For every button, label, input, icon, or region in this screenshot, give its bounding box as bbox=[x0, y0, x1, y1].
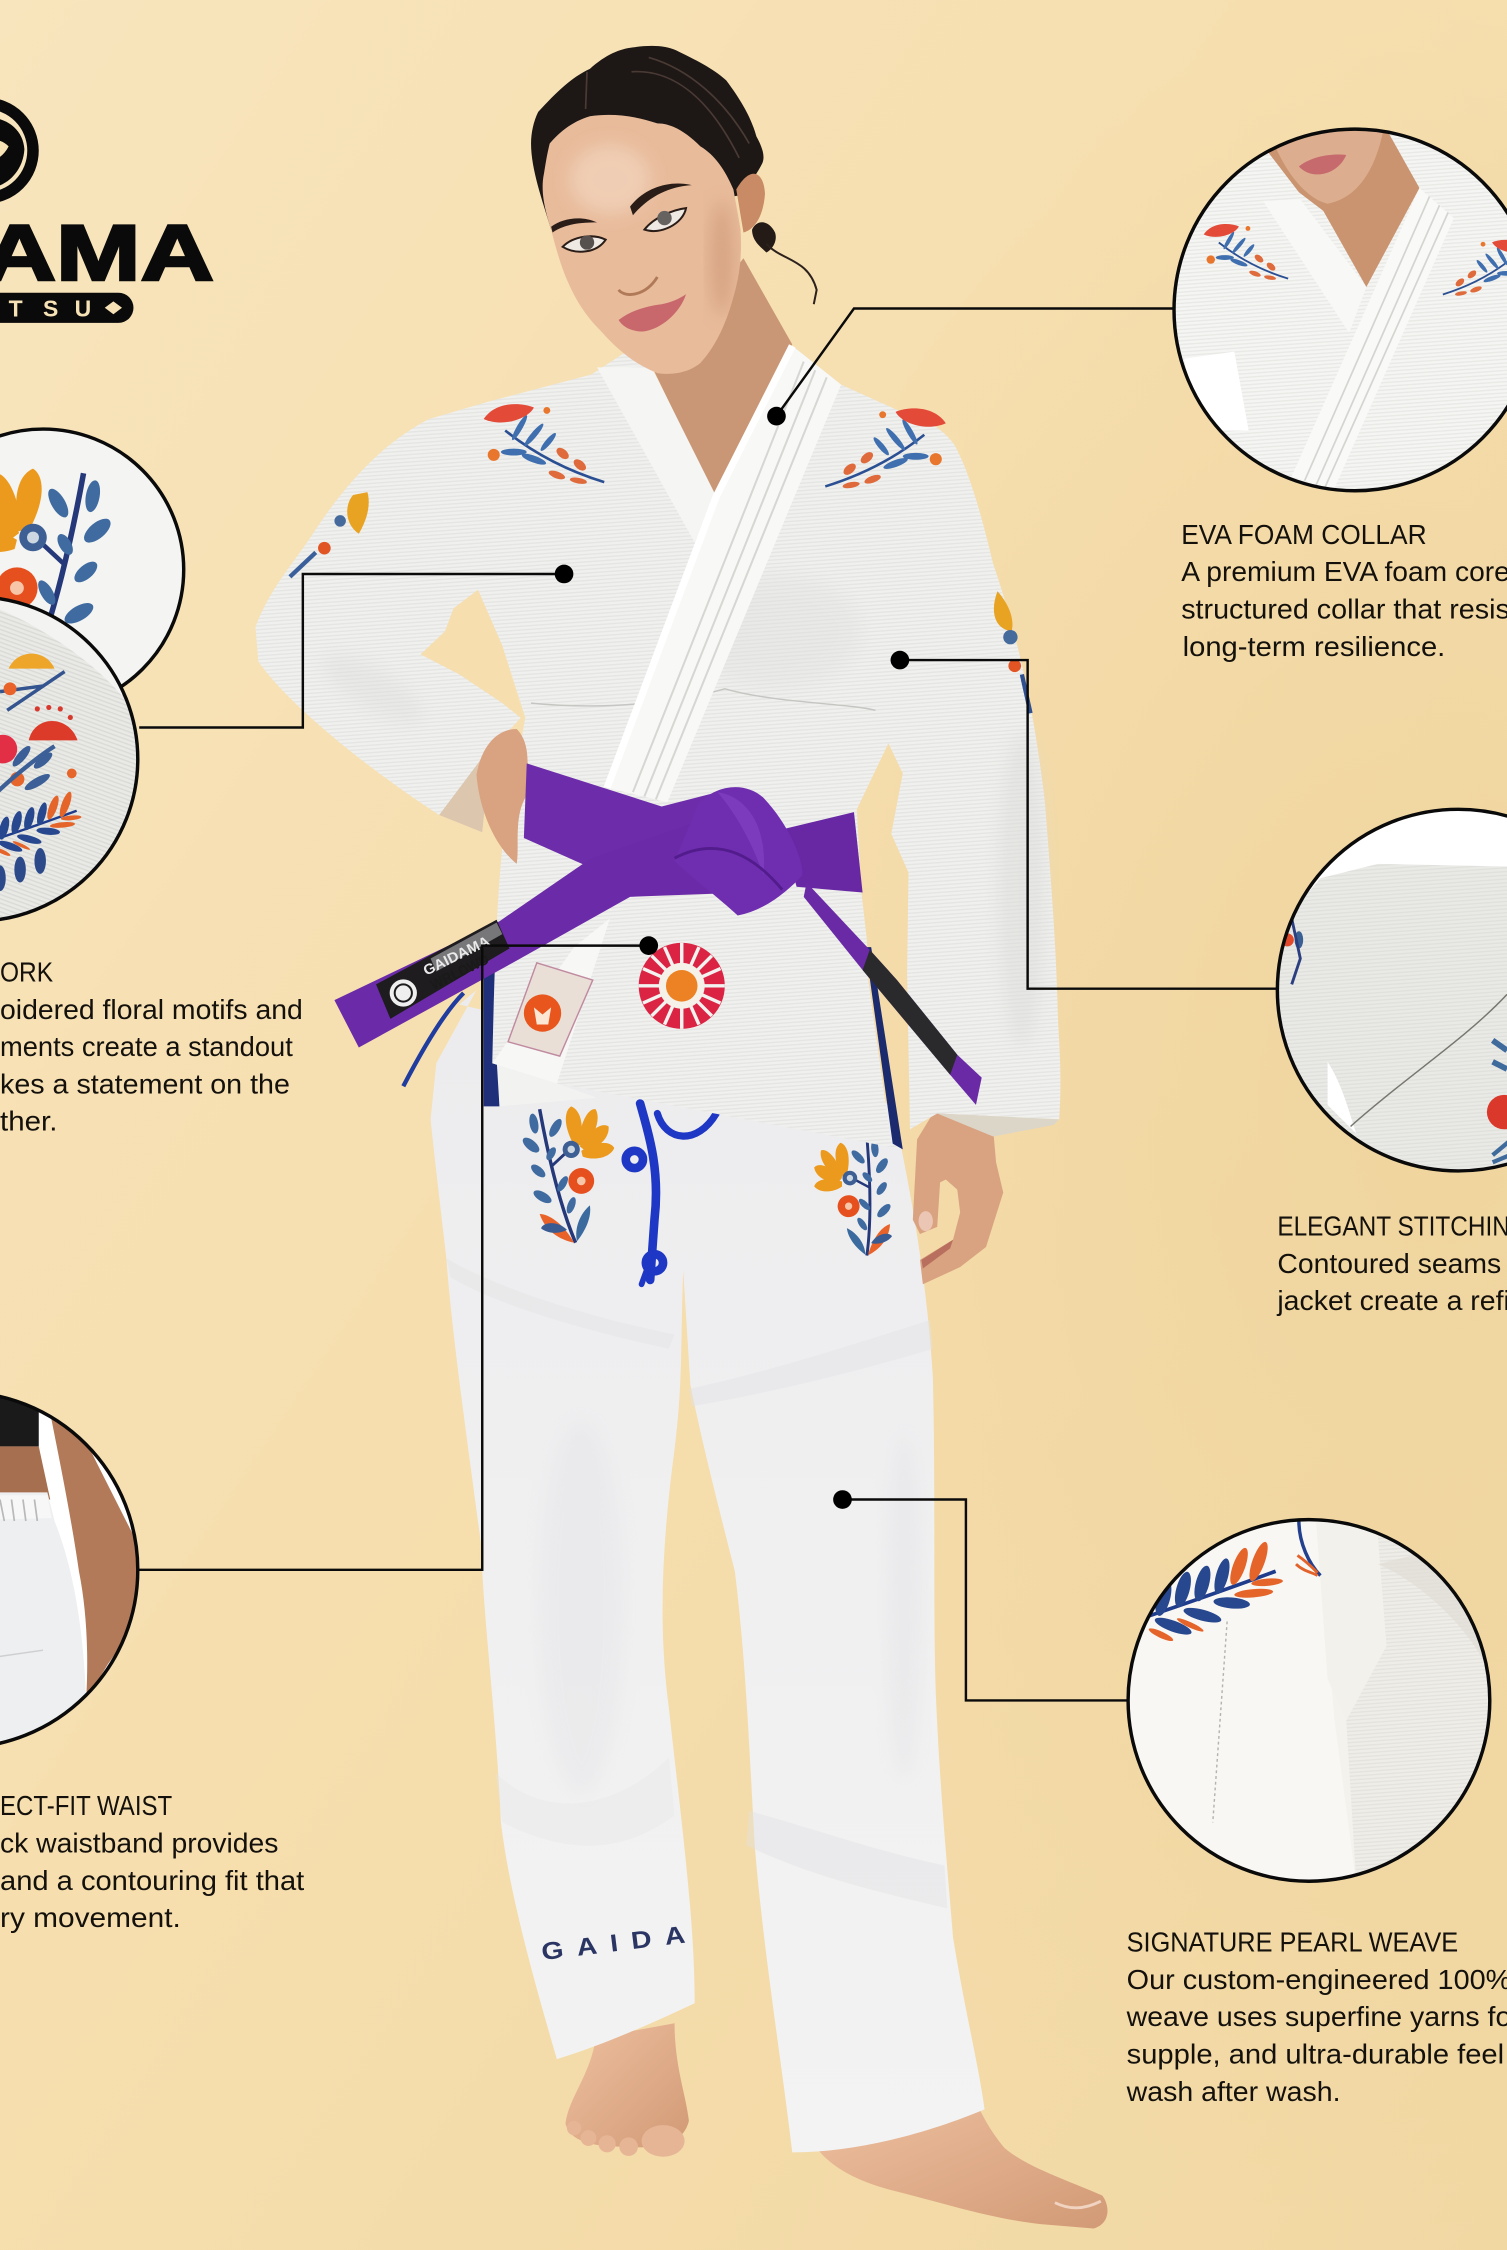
purple belt bbox=[334, 763, 982, 1105]
right hand bbox=[913, 1114, 1003, 1284]
detail circle: elegant stitching bbox=[1274, 804, 1507, 1177]
caption: embroidery artwork: kes a statement on the bbox=[0, 1068, 290, 1099]
detail circle: signature pearl weave bbox=[1127, 1518, 1493, 1884]
left lapel bbox=[597, 367, 716, 542]
caption: EVA foam collar: structured collar that resis bbox=[1181, 593, 1507, 624]
blue drawstring bbox=[626, 1103, 716, 1284]
caption: embroidery artwork: ther. bbox=[0, 1106, 57, 1137]
inner sleeve wrist bbox=[439, 746, 491, 832]
chest embroidery left bbox=[484, 404, 604, 485]
eyes bbox=[563, 208, 686, 252]
pants embroidery left bbox=[520, 1106, 614, 1243]
caption: perfect-fit waist bbox=[0, 1790, 305, 1933]
caption: signature pearl weave: wash after wash. bbox=[1126, 2076, 1341, 2107]
logo tagline pill bbox=[0, 293, 133, 323]
caption: perfect-fit waist: ck waistband provides bbox=[0, 1828, 278, 1859]
caption: EVA foam collar bbox=[1181, 519, 1507, 662]
belt knot bbox=[675, 787, 802, 915]
chest embroidery right bbox=[825, 408, 946, 489]
hair bun and loose strand bbox=[752, 222, 817, 304]
right foot bbox=[811, 2102, 1107, 2228]
ear bbox=[736, 174, 765, 232]
caption: elegant stitching bbox=[1276, 1210, 1507, 1316]
hair bbox=[531, 46, 763, 230]
detail circle: embroidery close-up front bbox=[0, 596, 144, 926]
callout line: stitching bbox=[891, 651, 1277, 989]
navy belt string bbox=[403, 993, 464, 1086]
detail circle: perfect-fit waist bbox=[0, 1389, 144, 1758]
nose bbox=[619, 277, 657, 294]
navy jacket edge bbox=[865, 947, 903, 1149]
red flower badge bbox=[639, 943, 725, 1029]
callout line: pearl weave bbox=[833, 1490, 1127, 1700]
hakama pants bbox=[431, 990, 985, 2152]
sleeve shading bbox=[999, 732, 1045, 1048]
eyebrows bbox=[551, 183, 692, 232]
logo: Gaidama Jiu Jitsu bbox=[0, 103, 214, 323]
logo tagline pill: TSU bbox=[9, 295, 91, 321]
belt right wrap bbox=[782, 812, 863, 893]
caption: perfect-fit waist: ry movement. bbox=[0, 1902, 181, 1933]
caption: embroidery artwork bbox=[0, 957, 303, 1137]
face bbox=[543, 115, 741, 374]
detail circle: EVA foam collar bbox=[1174, 129, 1507, 491]
caption: signature pearl weave: weave uses superfine yarns fo bbox=[1126, 2001, 1507, 2032]
belt right tail bbox=[804, 882, 982, 1105]
jacket lower flap bbox=[497, 1059, 597, 1106]
caption: embroidery artwork: ments create a standout bbox=[0, 1031, 293, 1062]
jacket waist seam bbox=[531, 689, 875, 710]
callout line: embroidery bbox=[139, 565, 573, 728]
sleeve embroidery right bbox=[994, 591, 1031, 713]
caption: signature pearl weave: SIGNATURE PEARL WEAVE bbox=[1127, 1927, 1458, 1958]
belt left tail: GAIDAMA bbox=[421, 934, 493, 979]
pants embroidery right bbox=[805, 1131, 912, 1264]
gi jacket body and sleeves bbox=[255, 346, 1060, 1149]
callout line: collar bbox=[767, 309, 1174, 425]
inner cuff lining bbox=[937, 1114, 1059, 1136]
caption: signature pearl weave bbox=[1126, 1927, 1507, 2107]
caption: embroidery artwork: oidered floral motifs and bbox=[0, 994, 303, 1025]
caption: EVA foam collar: EVA FOAM COLLAR bbox=[1181, 519, 1427, 550]
caption: embroidery artwork: ORK bbox=[0, 957, 53, 988]
caption: signature pearl weave: supple, and ultra-durable feel bbox=[1127, 2038, 1504, 2069]
skin neck and chest bbox=[652, 258, 792, 499]
patch lower jacket bbox=[492, 918, 610, 1083]
caption: perfect-fit waist: and a contouring fit that bbox=[0, 1865, 305, 1896]
callout line: waist bbox=[139, 936, 658, 1570]
detail circle: embroidery close-up back bbox=[0, 423, 187, 710]
belt left tail: WRLDWD bbox=[428, 952, 492, 994]
caption: EVA foam collar: long-term resilience. bbox=[1183, 631, 1445, 662]
belt left tail bbox=[334, 812, 746, 1048]
belt left wrap bbox=[524, 763, 732, 890]
armpit gap showing background bbox=[421, 590, 524, 720]
model figure wearing gi bbox=[255, 46, 1107, 2228]
pant leg logo text: GAIDA bbox=[540, 1920, 700, 1966]
right lapel band bbox=[607, 346, 841, 802]
head bbox=[531, 46, 817, 374]
caption: elegant stitching: Contoured seams bbox=[1277, 1248, 1501, 1279]
navy inner lapel strip bbox=[484, 970, 499, 1106]
lips bbox=[619, 294, 686, 331]
caption: EVA foam collar: A premium EVA foam core bbox=[1181, 556, 1507, 587]
caption: elegant stitching: jacket create a refi bbox=[1276, 1285, 1507, 1316]
left foot bbox=[565, 2023, 689, 2157]
caption: signature pearl weave: Our custom-engineered 100% bbox=[1127, 1964, 1507, 1995]
caption: perfect-fit waist: ECT-FIT WAIST bbox=[0, 1790, 172, 1821]
sleeve embroidery left bbox=[290, 492, 369, 577]
logo emblem bbox=[0, 103, 33, 198]
hand on hip bbox=[476, 729, 528, 864]
